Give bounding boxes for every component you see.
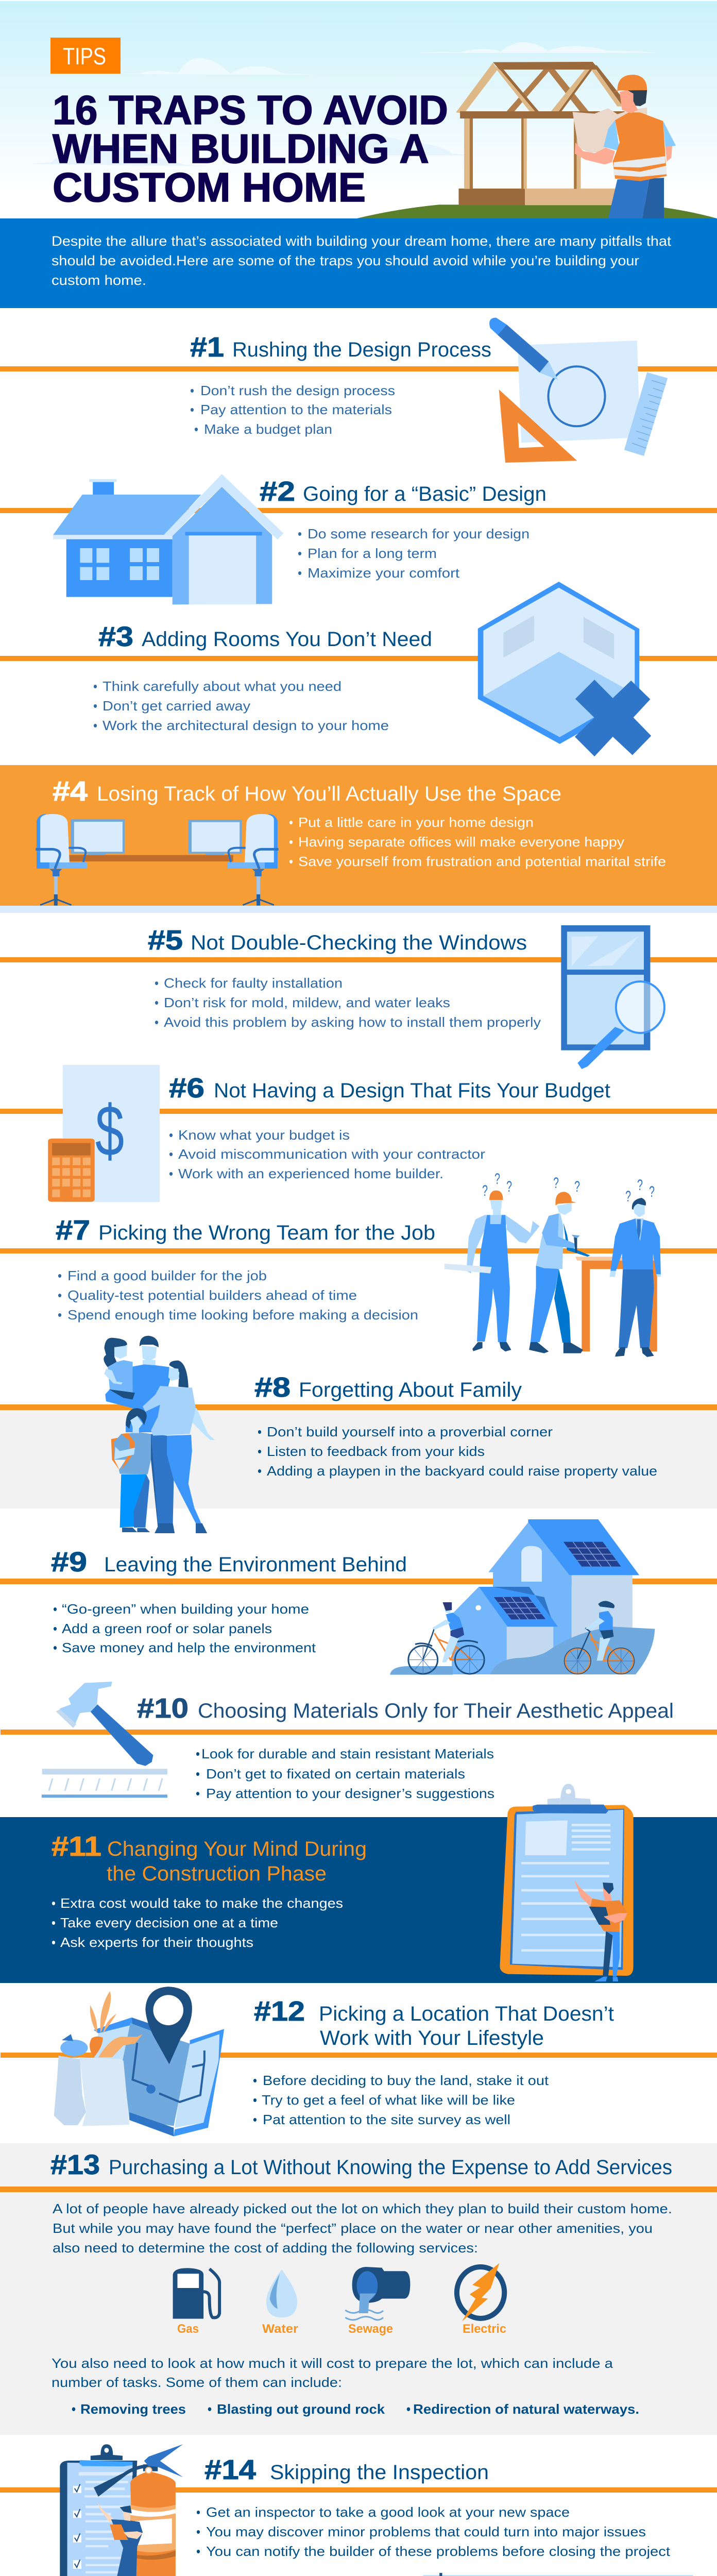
bullets: lot tasks: • (406, 2401, 411, 2417)
icon: water (266, 2269, 297, 2317)
heading: trap 11: #11 (52, 1831, 101, 1862)
bullets: trap 11: • (52, 1915, 56, 1930)
heading: trap 9: Leaving the Environment Behind (104, 1553, 407, 1576)
bullets: trap 5: • (155, 1014, 159, 1030)
bullets: trap 1: Don’t rush the design process (200, 383, 395, 398)
bullets: trap 14: • (196, 2524, 200, 2539)
heading: trap 7 (56, 1215, 435, 1246)
icon: two desks and chairs (36, 814, 279, 906)
panel: trap 2 (0, 474, 717, 604)
bullets: trap 8: • (258, 1444, 262, 1459)
bullets: trap 2: • (298, 546, 302, 561)
question marks: ? (494, 1171, 500, 1188)
bullets: trap 10 (196, 1746, 494, 1801)
heading: trap 14 (204, 2454, 489, 2485)
panel: trap 1 (0, 318, 717, 463)
bullets: trap 12: Pat attention to the site survey as well (263, 2112, 510, 2127)
heading: trap 8: #8 (254, 1372, 291, 1403)
icon: electric (457, 2263, 504, 2321)
bullets: lot tasks: Blasting out ground rock (217, 2401, 385, 2417)
text block: lot preparation: You also need to look at how much it will cost to prepare the lot, which can include a (52, 2355, 613, 2371)
bullets: trap 7: • (58, 1287, 62, 1303)
panel: trap 11 (0, 1784, 717, 1983)
tag: tips (50, 38, 121, 74)
question marks: ? (553, 1175, 559, 1192)
heading: trap 6 (169, 1073, 610, 1104)
bullets: trap 8: Adding a playpen in the backyard could raise property value (267, 1463, 657, 1479)
bullets: trap 11 (52, 1895, 343, 1950)
text block: lot preparation: number of tasks. Some of them can include: (52, 2375, 342, 2390)
bullets: trap 11: • (52, 1935, 56, 1950)
text block: services intro: A lot of people have already picked out the lot on which they plan to build their custom home. (53, 2201, 672, 2216)
icon: sewage (345, 2267, 410, 2320)
bullets: trap 8: • (258, 1463, 262, 1479)
panel: trap 13 (0, 2143, 717, 2435)
bullets: trap 6: • (169, 1146, 173, 1162)
heading: trap 3: Adding Rooms You Don’t Need (142, 628, 432, 651)
heading: trap 12: Work with Your Lifestyle (320, 2027, 544, 2049)
labels: services: Electric (463, 2322, 506, 2336)
panel: introduction (0, 218, 717, 308)
title: WHEN BUILDING A (53, 126, 429, 172)
bullets: lot tasks: • (72, 2401, 76, 2417)
bullets: trap 8: • (258, 1424, 262, 1439)
bullets: trap 3: • (93, 679, 97, 694)
heading: trap 3: #3 (98, 621, 133, 652)
heading: trap 4 (53, 776, 561, 807)
bullets: trap 9: • (53, 1640, 57, 1655)
bullets: trap 10: Don’t get to fixated on certain materials (206, 1766, 465, 1782)
title (53, 87, 448, 210)
bullets: trap 9: “Go-green” when building your home (62, 1601, 309, 1617)
panel: trap 14 (0, 2444, 717, 2576)
bullets: trap 10: • (196, 1746, 200, 1761)
question marks: ? (482, 1182, 488, 1199)
bullets: trap 6: Work with an experienced home builder. (178, 1166, 443, 1181)
heading: trap 4: #4 (53, 776, 88, 807)
bullets: trap 10: • (196, 1766, 200, 1782)
bullets: trap 4: • (289, 854, 293, 869)
labels: services (177, 2322, 506, 2336)
bullets: trap 6: • (169, 1166, 173, 1181)
bullets: trap 5: • (155, 975, 159, 991)
text block: services intro (53, 2201, 672, 2256)
bullets: trap 1: • (190, 402, 194, 417)
panel: trap 3 (0, 582, 717, 756)
panel: trap 9 (0, 1519, 717, 1675)
bullets: trap 1 (190, 383, 395, 437)
icon: hammer and board (42, 1682, 167, 1798)
bullets: trap 12: • (253, 2092, 257, 2108)
heading: trap 1: Rushing the Design Process (232, 338, 491, 361)
bullets: trap 7: Spend enough time looking before making a decision (67, 1307, 418, 1323)
bullets: trap 11: • (52, 1895, 56, 1911)
bullets: trap 6: • (169, 1127, 173, 1143)
bullets: trap 9 (53, 1601, 316, 1655)
bullets: trap 6: Know what your budget is (178, 1127, 350, 1143)
illustration: family (104, 1336, 215, 1533)
bullets: trap 4: Save yourself from frustration and potential marital strife (298, 854, 666, 869)
illustration: inspection clipboard and extinguisher (60, 2444, 183, 2576)
bullets: trap 12: Before deciding to buy the land, stake it out (263, 2073, 549, 2088)
icon: budget paper and calculator (48, 1065, 160, 1202)
bullets: trap 12 (253, 2073, 549, 2127)
heading: trap 12: Picking a Location That Doesn’t (319, 2003, 614, 2025)
bullets: trap 11: Take every decision one at a time (60, 1915, 278, 1930)
bullets: trap 5: Check for faulty installation (164, 975, 343, 991)
title: CUSTOM HOME (53, 164, 366, 210)
bullets: trap 3: Don’t get carried away (103, 698, 250, 714)
heading: trap 2 (260, 476, 547, 507)
table (582, 1261, 657, 1351)
panel: trap 12 (1, 1987, 717, 2137)
bullets: trap 1: • (190, 383, 194, 398)
text block: services intro: also need to determine the cost of adding the following services: (53, 2240, 478, 2256)
illustration: three workers (445, 1191, 661, 1357)
bullets: trap 4: • (289, 834, 293, 850)
icon: basic house (53, 474, 283, 604)
question marks: ? (649, 1183, 655, 1200)
left cyclist (408, 1602, 484, 1674)
bullets: trap 5: • (155, 995, 159, 1010)
illustration: clipboard and person (500, 1784, 634, 1981)
bullets: trap 12: • (253, 2073, 257, 2088)
heading: trap 5: Not Double-Checking the Windows (191, 931, 527, 954)
bullets: trap 1: Pay attention to the materials (200, 402, 392, 417)
bullets: trap 14: You can notify the builder of these problems before closing the project (206, 2544, 671, 2559)
bullets: trap 5: Avoid this problem by asking how to install them properly (164, 1014, 541, 1030)
question marks: ? (506, 1178, 512, 1195)
illustration: worker and house frame (356, 62, 717, 218)
bullets: trap 1: Make a budget plan (204, 421, 332, 437)
bullets: trap 10: • (196, 1786, 200, 1801)
heading: trap 14: #14 (204, 2454, 256, 2485)
heading: trap 1 (190, 332, 491, 363)
bullets: trap 2: • (298, 526, 302, 541)
bullets: trap 3: Think carefully about what you need (103, 679, 342, 694)
text block: lot preparation (52, 2355, 613, 2390)
bullets: trap 4: • (289, 815, 293, 830)
bullets: trap 3 (93, 679, 389, 733)
bullets: trap 12: • (253, 2112, 257, 2127)
heading: trap 10: #10 (137, 1693, 189, 1724)
illustration: solar house and cyclists (390, 1519, 655, 1675)
bullets: trap 7 (58, 1268, 418, 1323)
bullets: trap 1: • (194, 421, 198, 437)
bullets: trap 7: Find a good builder for the job (67, 1268, 267, 1283)
bullets: lot tasks: • (208, 2401, 212, 2417)
heading: trap 11 (52, 1831, 367, 1885)
labels: services: Gas (177, 2322, 199, 2336)
bullets: trap 12: Try to get a feel of what like will be like (262, 2092, 515, 2108)
question marks: ? (637, 1177, 643, 1194)
bullets: trap 14 (196, 2504, 671, 2559)
heading: trap 5: #5 (148, 925, 183, 956)
panel: trap 10 (1, 1682, 717, 1801)
bullets: trap 10: Look for durable and stain resistant Materials (201, 1746, 494, 1761)
bullets: trap 7: • (58, 1268, 62, 1283)
bullets: trap 11: Extra cost would take to make the changes (60, 1895, 343, 1911)
bullets: trap 3: • (93, 698, 97, 714)
bullets: trap 14: • (196, 2504, 200, 2520)
bullets: trap 2: Plan for a long term (308, 546, 437, 561)
question marks: ? (625, 1188, 631, 1205)
bullets: trap 4 (289, 815, 666, 869)
bullets: trap 6: Avoid miscommunication with your contractor (178, 1146, 485, 1162)
bullets: trap 8: Don’t build yourself into a proverbial corner (267, 1424, 553, 1439)
icon: room with x mark (478, 582, 651, 756)
bullets: trap 8: Listen to feedback from your kids (267, 1444, 485, 1459)
panel: trap 4 (0, 765, 717, 913)
bullets: trap 3: Work the architectural design to your home (103, 718, 389, 733)
heading: trap 9 (51, 1547, 407, 1578)
bullets: trap 5 (155, 975, 541, 1030)
bullets: trap 9: Save money and help the environment (62, 1640, 316, 1655)
panel: introduction: custom home. (52, 273, 146, 288)
bullets: lot tasks (72, 2401, 639, 2417)
heading: trap 5 (148, 925, 527, 956)
bullets: trap 14: You may discover minor problems that could turn into major issues (206, 2524, 646, 2539)
heading: trap 13: #13 (50, 2149, 100, 2180)
question marks (482, 1171, 655, 1205)
bullets: trap 2: • (298, 565, 302, 581)
bullets: trap 9: Add a green roof or solar panels (62, 1621, 272, 1636)
bullets: trap 14: Get an inspector to take a good look at your new space (206, 2504, 570, 2520)
bullets: trap 9: • (53, 1621, 57, 1636)
bullets: lot tasks: Removing trees (80, 2401, 186, 2417)
tag: tips: TIPS (63, 43, 106, 70)
icon: window and magnifier (561, 925, 664, 1069)
text block: services intro: But while you may have found the “perfect” place on the water or near other amenities, you (53, 2221, 653, 2236)
bullets: trap 11: Ask experts for their thoughts (60, 1935, 253, 1950)
heading: trap 6: Not Having a Design That Fits Your Budget (214, 1079, 610, 1102)
heading: trap 2: Going for a “Basic” Design (303, 483, 547, 505)
heading: trap 11: Changing Your Mind During (107, 1838, 367, 1860)
bullets: trap 7: • (58, 1307, 62, 1323)
bullets: lot tasks: Redirection of natural waterways. (413, 2401, 639, 2417)
illustration: map, pin and groceries (54, 1987, 224, 2137)
heading: trap 10: Choosing Materials Only for Their Aesthetic Appeal (198, 1700, 674, 1722)
icon: drafting tools (489, 318, 668, 463)
heading: trap 8 (254, 1372, 522, 1403)
bullets: trap 6 (169, 1127, 485, 1181)
bullets: trap 2: Maximize your comfort (308, 565, 460, 581)
bullets: trap 4: Put a little care in your home design (298, 815, 534, 830)
heading: trap 9: #9 (51, 1547, 87, 1578)
bullets: trap 7: Quality-test potential builders ahead of time (67, 1287, 357, 1303)
heading: trap 2: #2 (260, 476, 295, 507)
heading: trap 7: Picking the Wrong Team for the Job (98, 1222, 435, 1244)
heading: trap 12: #12 (254, 1996, 305, 2027)
clouds (30, 42, 658, 166)
panel: trap 15 (0, 2573, 717, 2576)
icon: budget paper and calculator: $ (95, 1090, 124, 1171)
heading: trap 4: Losing Track of How You’ll Actually Use the Space (97, 783, 561, 805)
heading: trap 10 (137, 1693, 674, 1724)
right cyclist (565, 1601, 634, 1674)
bullets: trap 8 (258, 1424, 657, 1479)
panel: trap 7 (0, 1171, 717, 1357)
panel: trap 5 (0, 925, 717, 1069)
heading: trap 3 (98, 621, 432, 652)
illustration: ductwork and workers (412, 2573, 696, 2576)
question marks: ? (574, 1178, 580, 1195)
heading: trap 14: Skipping the Inspection (270, 2461, 489, 2484)
panel: trap 6 (0, 1065, 717, 1202)
labels: services: Sewage (348, 2322, 393, 2336)
heading: trap 12 (254, 1996, 614, 2049)
panel: introduction: should be avoided.Here are some of the traps you should avoid while you’re building your (52, 253, 639, 268)
bullets: trap 14: • (196, 2544, 200, 2559)
panel: trap 8 (0, 1336, 717, 1533)
bullets: trap 3: • (93, 718, 97, 733)
heading: trap 7: #7 (56, 1215, 90, 1246)
heading: trap 1: #1 (190, 332, 224, 363)
bullets: trap 9: • (53, 1601, 57, 1617)
heading: trap 11: the Construction Phase (107, 1862, 327, 1885)
icon: gas (173, 2268, 219, 2319)
bullets: trap 4: Having separate offices will make everyone happy (298, 834, 624, 850)
heading: trap 13 (50, 2149, 672, 2180)
bullets: trap 2: Do some research for your design (308, 526, 530, 541)
heading: trap 8: Forgetting About Family (299, 1379, 522, 1401)
title: 16 TRAPS TO AVOID (53, 87, 448, 133)
panel: header (0, 1, 717, 218)
heading: trap 13: Purchasing a Lot Without Knowing the Expense to Add Services (109, 2156, 672, 2179)
panel: introduction: Despite the allure that’s associated with building your dream home, there are many pitfalls that (52, 233, 672, 249)
bullets: trap 10: Pay attention to your designer’s suggestions (206, 1786, 494, 1801)
bullets: trap 5: Don’t risk for mold, mildew, and water leaks (164, 995, 450, 1010)
heading: trap 6: #6 (169, 1073, 204, 1104)
labels: services: Water (262, 2322, 298, 2336)
bullets: trap 2 (298, 526, 530, 581)
